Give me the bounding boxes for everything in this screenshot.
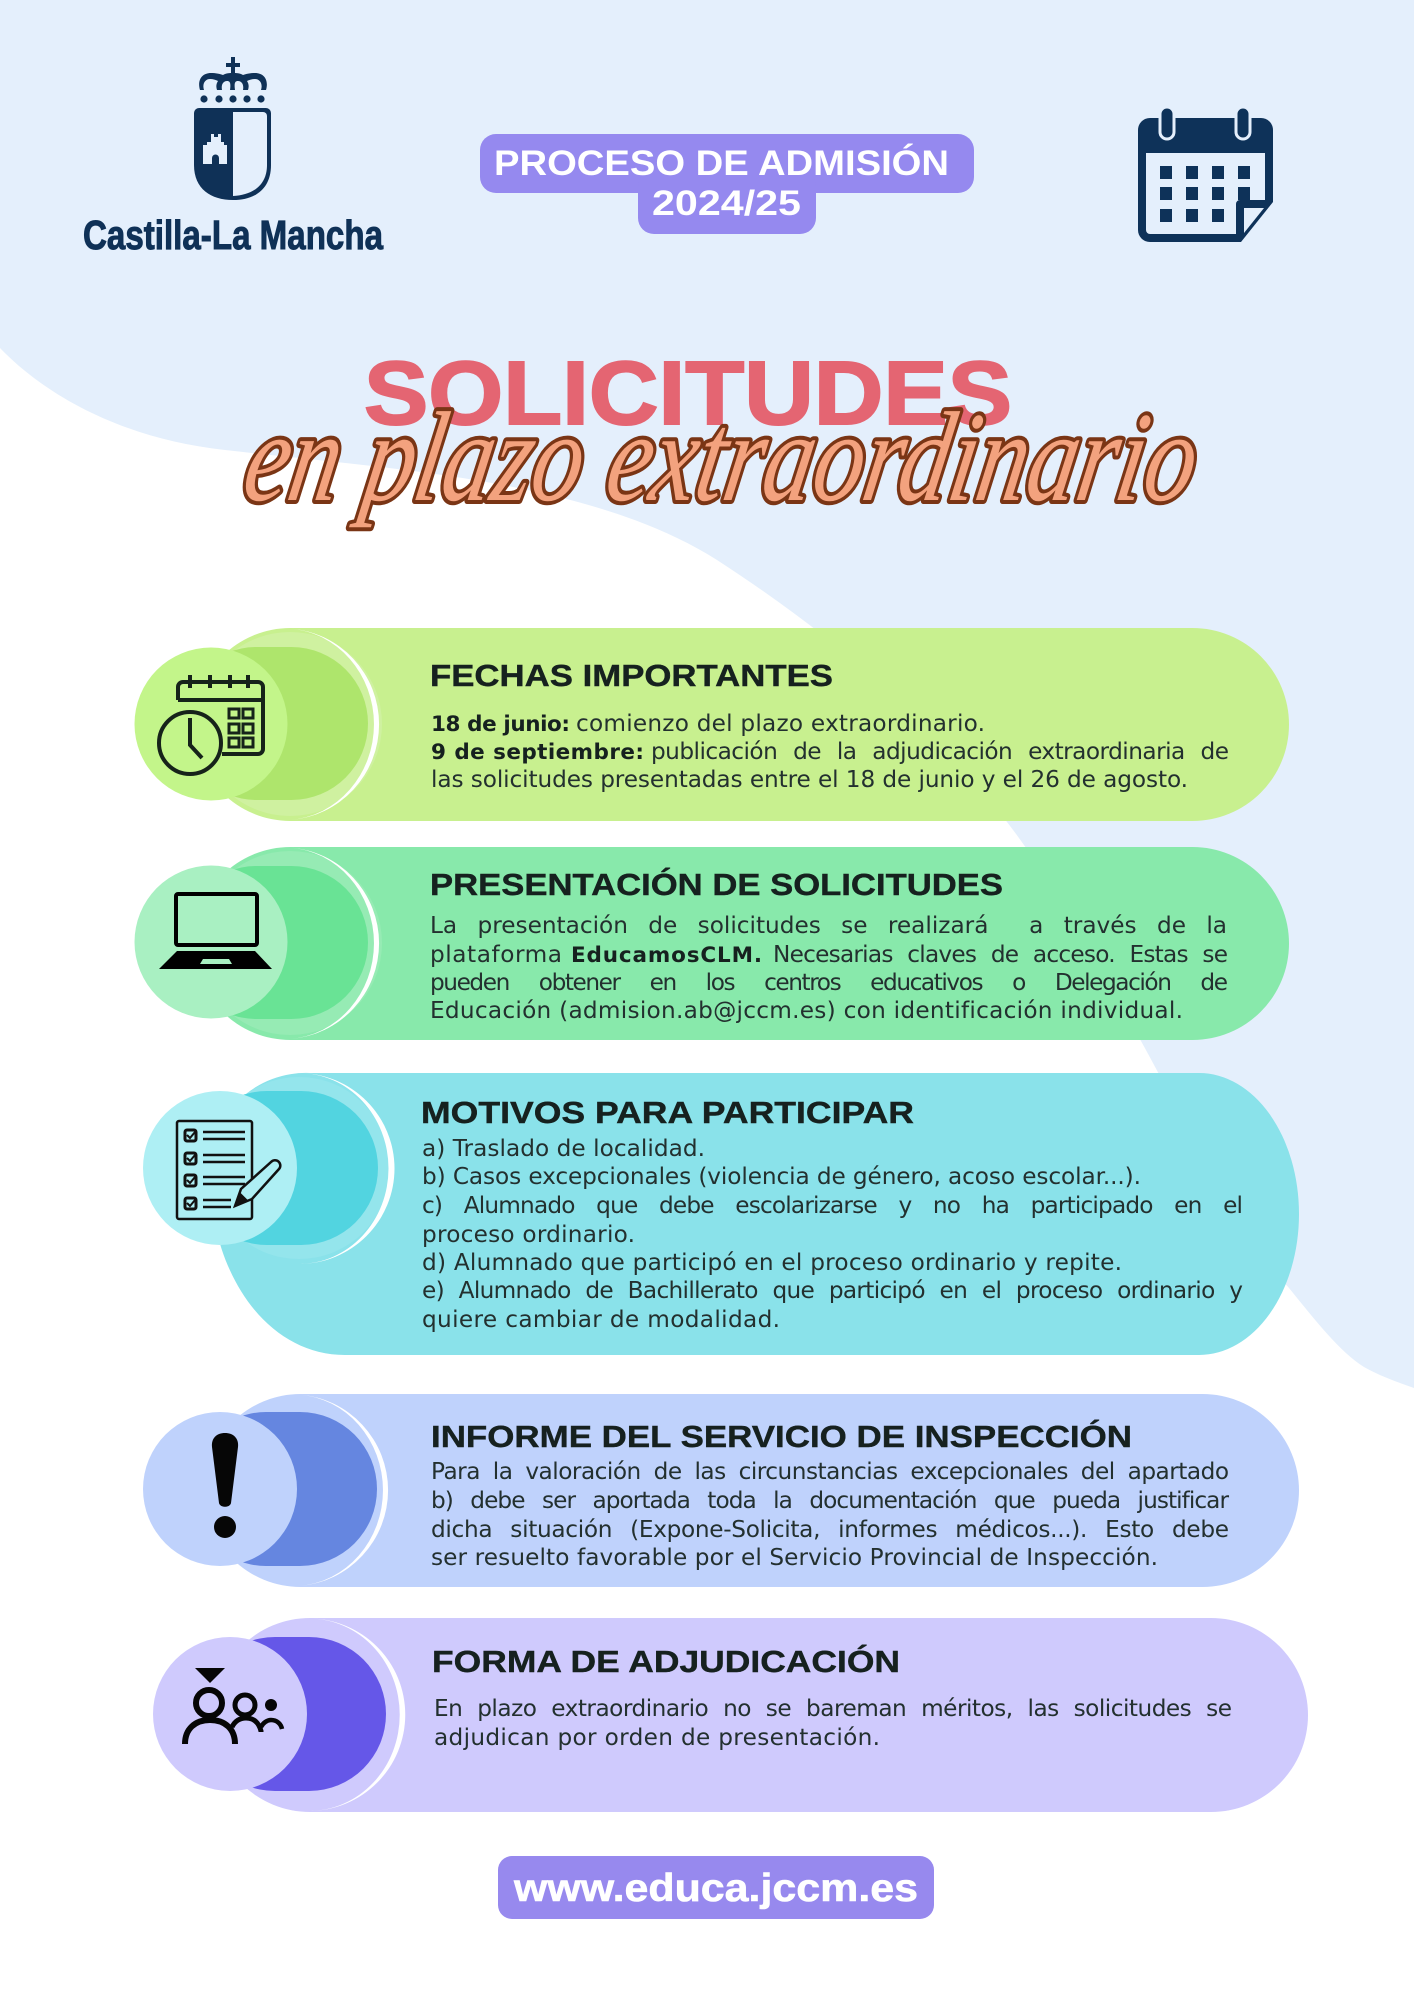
icon: exclamation mark [212, 1433, 238, 1538]
text: presentación: plataforma [430, 941, 562, 968]
header badge: proceso de admisión [480, 134, 974, 234]
icon: laptop [159, 894, 272, 969]
text: forma: adjudican por orden de presentación. [434, 1724, 880, 1751]
heading: presentación: PRESENTACIÓN DE SOLICITUDES [430, 866, 1003, 902]
text: motivos: proceso ordinario. [422, 1221, 635, 1248]
text: presentación: La presentación de solicitudes se realizará a través de la [430, 912, 1227, 939]
text: fechas [431, 710, 1229, 793]
text: forma: En plazo extraordinario no se bareman méritos, las solicitudes se [434, 1695, 1232, 1722]
text: motivos: quiere cambiar de modalidad. [422, 1306, 780, 1333]
text: informe [431, 1458, 1229, 1571]
text: presentación: Educación (admision.ab@jccm.es) con identificación individual. [430, 997, 1183, 1024]
text: forma [434, 1695, 1232, 1751]
panel: motivos para participar [143, 1073, 1299, 1355]
footer url badge [498, 1856, 934, 1919]
text: informe: Para la valoración de las circunstancias excepcionales del apartado [431, 1458, 1229, 1485]
icon: checklist with pencil [177, 1121, 280, 1219]
title: SOLICITUDES: SOLICITUDES [364, 344, 1012, 444]
logo: Castilla-La Mancha [83, 57, 384, 258]
text: fechas: comienzo del plazo extraordinario. [576, 710, 985, 737]
text: motivos: b) Casos excepcionales (violencia de género, acoso escolar...). [422, 1163, 1141, 1190]
header badge: proceso de admisión: 2024/25 [652, 184, 801, 223]
text: fechas: 9 de septiembre: [431, 740, 644, 765]
panel: presentación de solicitudes [134, 847, 1289, 1040]
text: fechas: publicación de la adjudicación extraordinaria de [651, 738, 1229, 765]
icon: calendar and clock [159, 675, 263, 774]
text: motivos: a) Traslado de localidad. [422, 1135, 705, 1162]
header badge: proceso de admisión: PROCESO DE ADMISIÓN [494, 143, 949, 183]
text: presentación [430, 912, 1228, 1024]
text: presentación: EducamosCLM. [571, 943, 762, 968]
text: informe: ser resuelto favorable por el Servicio Provincial de Inspección. [431, 1544, 1158, 1571]
text: fechas: las solicitudes presentadas entre el 18 de junio y el 26 de agosto. [431, 766, 1188, 793]
text: presentación: Necesarias claves de acceso. Estas se [773, 941, 1228, 968]
text: motivos: c) Alumnado que debe escolarizarse y no ha participado en el [422, 1192, 1243, 1219]
footer url badge: www.educa.jccm.es [513, 1867, 918, 1910]
panel: forma de adjudicación [153, 1618, 1308, 1812]
text: presentación: pueden obtener en los centros educativos o Delegación de [430, 969, 1228, 996]
text: fechas: 18 de junio: [431, 712, 570, 737]
panel: informe del servicio de inspección [143, 1394, 1299, 1587]
heading: motivos: MOTIVOS PARA PARTICIPAR [421, 1095, 914, 1130]
panel: fechas importantes [134, 628, 1289, 821]
logo: Castilla-La Mancha: Castilla-La Mancha [83, 212, 384, 258]
icon: calendar [1138, 107, 1273, 242]
heading: forma: FORMA DE ADJUDICACIÓN [432, 1643, 900, 1679]
icon: people [185, 1668, 282, 1744]
text: informe: dicha situación (Expone-Solicita, informes médicos...). Esto debe [431, 1516, 1229, 1543]
text: motivos: e) Alumnado de Bachillerato que participó en el proceso ordinario y [422, 1277, 1243, 1304]
text: motivos [422, 1135, 1243, 1333]
text: motivos: d) Alumnado que participó en el proceso ordinario y repite. [422, 1249, 1122, 1276]
text: informe: b) debe ser aportada toda la documentación que pueda justificar [431, 1487, 1229, 1514]
heading: informe: INFORME DEL SERVICIO DE INSPECCIÓN [431, 1418, 1132, 1454]
heading: fechas importantes: FECHAS IMPORTANTES [430, 658, 833, 693]
